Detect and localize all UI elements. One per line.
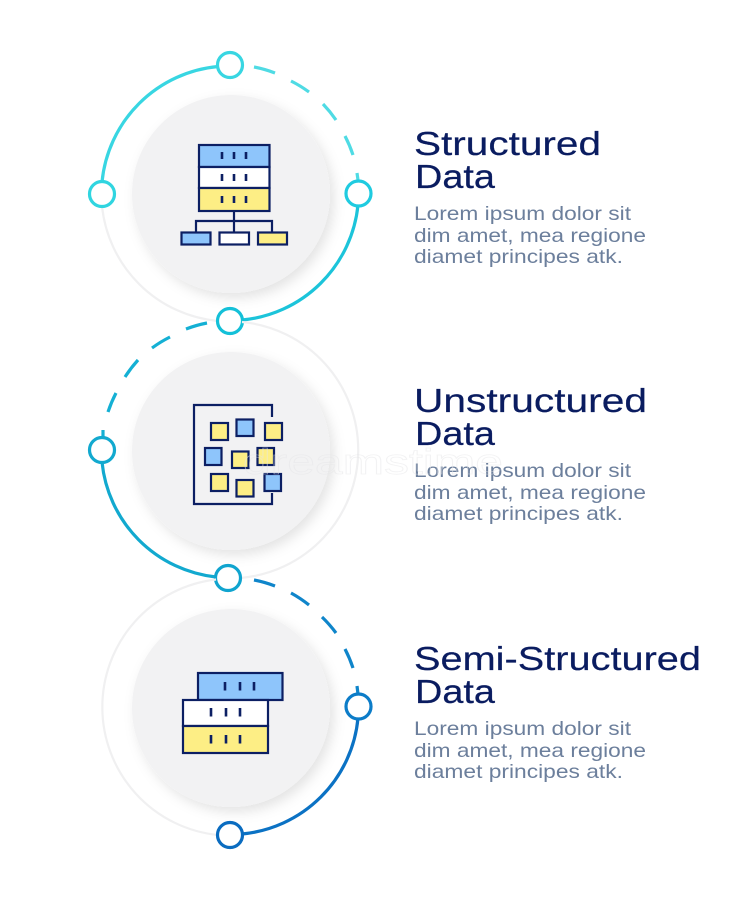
heading line 2: Data xyxy=(415,158,496,195)
disc xyxy=(132,95,330,293)
node: left xyxy=(90,182,114,206)
text block: structured data xyxy=(414,125,646,268)
solid arc, left to bottom xyxy=(102,462,216,577)
body xyxy=(414,203,646,268)
panel: structured data diagram xyxy=(90,52,371,334)
body: Lorem ipsum dolor sit xyxy=(414,203,632,225)
node: bottom xyxy=(218,822,242,848)
background ring, unstructured data xyxy=(240,322,358,578)
body: Lorem ipsum dolor sit xyxy=(414,718,632,740)
node: bottom xyxy=(218,308,242,334)
heading: Unstructured xyxy=(414,382,647,419)
body: dim amet, mea regione xyxy=(414,482,646,504)
dashed arc, top to left xyxy=(103,323,207,438)
node: left xyxy=(90,438,114,462)
body xyxy=(414,460,646,525)
dashed arc, top to right xyxy=(254,580,358,694)
heading line 2: Data xyxy=(415,415,496,452)
body: diamet principes atk. xyxy=(414,246,623,268)
body: Lorem ipsum dolor sit xyxy=(414,460,632,482)
node: top xyxy=(218,52,242,78)
text block: semi-structured data xyxy=(414,640,701,783)
dashed arc, top to right xyxy=(254,67,358,180)
node: right xyxy=(346,694,371,719)
solid arc, right to bottom xyxy=(242,205,358,320)
text block: unstructured data xyxy=(414,382,647,525)
panel: unstructured data diagram xyxy=(90,322,358,590)
heading: Semi-Structured xyxy=(414,640,701,677)
body xyxy=(414,718,646,783)
icon: scattered data document xyxy=(194,405,282,504)
heading: Structured xyxy=(414,125,601,162)
watermark: dreamstime xyxy=(243,441,503,482)
body: diamet principes atk. xyxy=(414,503,623,525)
icon: hierarchical database xyxy=(182,145,287,244)
solid arc, left to top xyxy=(102,66,218,182)
panel: semi-structured data diagram xyxy=(102,580,371,848)
disc xyxy=(132,609,330,807)
body: dim amet, mea regione xyxy=(414,740,646,762)
background ring, structured data xyxy=(102,206,218,321)
body: dim amet, mea regione xyxy=(414,225,646,247)
body: diamet principes atk. xyxy=(414,761,623,783)
solid arc, right to bottom xyxy=(242,718,358,834)
background ring, semi-structured data xyxy=(102,580,218,835)
node: right xyxy=(346,181,371,206)
icon: stacked tables xyxy=(183,673,282,753)
disc xyxy=(132,352,330,550)
node: bottom xyxy=(216,566,240,590)
heading line 2: Data xyxy=(415,673,496,710)
